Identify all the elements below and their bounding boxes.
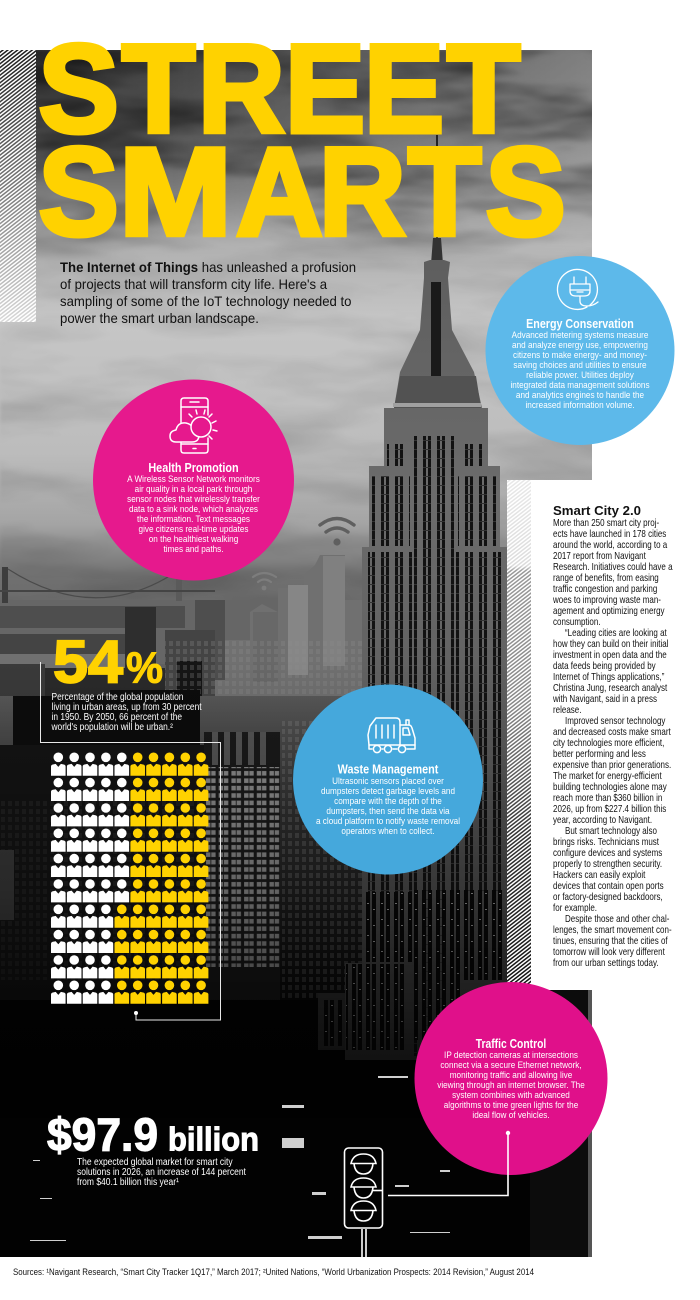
callout: 54 percent: % xyxy=(126,644,163,692)
sidebar: Smart City 2.0: investment in open data and the xyxy=(553,649,667,660)
panel: health promotion: A Wireless Sensor Network monitors xyxy=(127,474,260,484)
intro text: power the smart urban landscape. xyxy=(60,311,259,326)
Empire State Building xyxy=(345,135,507,1060)
distant bridge and water xyxy=(0,567,215,668)
panel: waste management: Waste Management xyxy=(338,763,438,777)
sidebar: Smart City 2.0: consumption. xyxy=(553,616,601,627)
sidebar: Smart City 2.0: range of benefits, from easing xyxy=(553,572,659,583)
panel: traffic control: viewing through an internet browser. The xyxy=(437,1080,585,1090)
panel: health promotion xyxy=(93,380,294,580)
panel: health promotion: times and paths. xyxy=(164,544,223,554)
panel: waste management: operators when to collect. xyxy=(341,826,435,836)
sources footnote: Sources: ¹Navigant Research, “Smart City Tracker 1Q17,” March 2017; ²United Nations, “World Urbanization Prospects: 2014 Revision,” August 2014 xyxy=(13,1267,534,1277)
sidebar: Smart City 2.0: tomorrow will look very different xyxy=(553,946,665,957)
sidebar: Smart City 2.0: Research. Initiatives could have a xyxy=(553,561,673,572)
street-level highlights xyxy=(30,1076,450,1241)
panel: energy conservation: and analytics engines to handle the xyxy=(516,390,644,400)
callout: market size: $97.9 xyxy=(47,1108,158,1160)
left hatched strip xyxy=(0,50,36,322)
sidebar: Smart City 2.0: Despite those and other chal- xyxy=(565,913,669,924)
sidebar: Smart City 2.0: But smart technology also xyxy=(565,825,657,836)
sidebar: Smart City 2.0: “Leading cities are looking at xyxy=(565,627,667,638)
panel: health promotion: data to a sink node, which analyzes xyxy=(129,504,259,514)
intro text: of projects that will transform city life. Here's a xyxy=(60,277,328,292)
panel: energy conservation: increased information volume. xyxy=(525,400,635,410)
sidebar: Smart City 2.0: building technologies alone may xyxy=(553,781,667,792)
photo: city skyline and Empire State Building xyxy=(0,50,600,1258)
callout: 54 percent: in 1950. By 2050, 66 percent of the xyxy=(52,711,182,722)
sidebar: Smart City 2.0: configure devices and systems xyxy=(553,847,663,858)
title: ARTS xyxy=(236,122,566,261)
sidebar: Smart City 2.0 xyxy=(552,503,673,968)
sidebar: Smart City 2.0: Smart City 2.0 xyxy=(553,503,641,518)
panel: waste management: Ultrasonic sensors placed over xyxy=(332,776,444,786)
title xyxy=(39,19,566,262)
callout: 54 percent: living in urban areas, up from 30 percent xyxy=(52,701,202,712)
panel: traffic control xyxy=(414,982,608,1175)
panel: waste management: dumpsters detect garbage levels and xyxy=(321,786,455,796)
callout: 54 percent xyxy=(51,628,202,732)
sidebar: Smart City 2.0: agement and optimizing energy xyxy=(553,605,665,616)
sidebar: Smart City 2.0: and decreased costs make smart xyxy=(553,726,671,737)
panel: traffic control: ideal flow of vehicles. xyxy=(472,1110,550,1120)
panel: health promotion: sensor nodes that wirelessly transfer xyxy=(127,494,260,504)
sidebar: Smart City 2.0: woes to improving waste man- xyxy=(552,594,661,605)
panel: energy conservation: citizens to make energy- and money- xyxy=(513,350,647,360)
callout: 54 percent: world's population will be urban.² xyxy=(51,721,173,732)
panel: energy conservation xyxy=(486,256,674,445)
panel: waste management: dumpsters, then send the data via xyxy=(326,806,450,816)
callout: 54 percent: 54 xyxy=(53,628,124,696)
sidebar: Smart City 2.0: tinues, ensuring that the cities of xyxy=(553,935,668,946)
sidebar: Smart City 2.0: from our urban settings today. xyxy=(553,957,659,968)
callout frame line xyxy=(40,662,220,1020)
panel: health promotion: air quality in a local park through xyxy=(135,484,252,494)
icon: phone with cloud and sun xyxy=(170,398,217,453)
sidebar: Smart City 2.0: how they can build on their initial xyxy=(553,638,669,649)
panel: traffic control: monitoring traffic and allowing live xyxy=(450,1070,572,1080)
panel: energy conservation: and analyze energy use, empowering xyxy=(512,340,648,350)
panel: traffic control: IP detection cameras at intersections xyxy=(444,1050,579,1060)
sky xyxy=(0,50,600,1257)
panel: health promotion: the information. Text messages xyxy=(137,514,251,524)
near city blocks xyxy=(0,690,364,1000)
sidebar: Smart City 2.0: data feeds being provided by xyxy=(553,660,656,671)
pictogram: 54 percent urban figures xyxy=(114,752,208,1004)
pictogram: 46 percent non-urban figures xyxy=(51,752,129,1004)
icon: traffic light with connector xyxy=(344,1131,510,1257)
sidebar: Smart City 2.0: reach more than $360 billion in xyxy=(553,792,662,803)
panel: traffic control: algorithms to time green lights for the xyxy=(444,1100,578,1110)
icon: garbage truck xyxy=(368,718,415,753)
panel: waste management: a cloud platform to notify waste removal xyxy=(316,816,460,826)
title: STREET xyxy=(39,19,520,159)
sidebar: Smart City 2.0: better performing and less xyxy=(553,748,646,759)
panel: energy conservation: Advanced metering systems measure xyxy=(512,330,649,340)
sidebar: Smart City 2.0: around the world, according to a xyxy=(553,539,668,550)
sidebar: Smart City 2.0: brings risks. Technicians must xyxy=(553,836,659,847)
callout: 54 percent: Percentage of the global population xyxy=(52,691,183,702)
sidebar: Smart City 2.0: properly to strengthen security. xyxy=(553,858,662,869)
panel: traffic control: Traffic Control xyxy=(476,1038,546,1051)
sidebar: Smart City 2.0: Internet of Things applications,” xyxy=(553,671,664,682)
icon: small wifi xyxy=(253,573,276,590)
sidebar: Smart City 2.0: The market for energy-efficient xyxy=(553,770,662,781)
panel: traffic control: connect via a secure Ethernet network, xyxy=(440,1060,582,1070)
callout: market size: The expected global market for smart city xyxy=(77,1156,233,1167)
sidebar: Smart City 2.0: with Navigant, said in a press xyxy=(552,693,657,704)
panel: energy conservation: saving choices and utilities to ensure xyxy=(513,360,647,370)
title: M xyxy=(119,122,232,262)
sidebar: Smart City 2.0: traffic congestion and parking xyxy=(553,583,657,594)
sidebar: Smart City 2.0: or factory-designed backdoors, xyxy=(553,891,663,902)
intro text: sampling of some of the IoT technology needed to xyxy=(60,294,351,309)
sidebar: Smart City 2.0: Christina Jung, research analyst xyxy=(553,682,668,693)
title: S xyxy=(39,122,119,261)
sidebar: Smart City 2.0: ects have launched in 178 cities xyxy=(553,528,667,539)
sidebar: Smart City 2.0: More than 250 smart city proj- xyxy=(553,517,659,528)
sidebar: Smart City 2.0: year, according to Navigant. xyxy=(553,814,652,825)
panel: health promotion: Health Promotion xyxy=(148,461,239,475)
panel: waste management: compare with the depth of the xyxy=(334,796,442,806)
sidebar: Smart City 2.0: 2017 report from Navigant xyxy=(553,550,646,561)
right hatched strip xyxy=(507,480,531,985)
small low-rise building xyxy=(318,993,345,1050)
darkening toward street level xyxy=(0,728,592,1257)
callout: market size: solutions in 2026, an increase of 144 percent xyxy=(77,1166,246,1177)
windowed building xyxy=(204,732,280,967)
sidebar: Smart City 2.0: 2026, up from $227.4 billion this xyxy=(553,803,667,814)
sidebar: Smart City 2.0: Hackers can easily exploit xyxy=(553,869,646,880)
panel: health promotion: give citizens real-time updates xyxy=(139,524,249,534)
sidebar: Smart City 2.0: Improved sensor technology xyxy=(565,715,666,726)
sidebar: Smart City 2.0: release. xyxy=(553,704,581,715)
panel: energy conservation: integrated data management solutions xyxy=(510,380,650,390)
panel: waste management xyxy=(293,684,483,874)
sidebar: Smart City 2.0: expensive than prior generations. xyxy=(553,759,671,770)
sidebar: Smart City 2.0: devices that contain open ports xyxy=(553,880,664,891)
panel: traffic control: system combines with advanced xyxy=(452,1090,570,1100)
callout: market size xyxy=(47,1108,259,1187)
sidebar: Smart City 2.0: city technologies more efficient, xyxy=(553,737,664,748)
icon: plug xyxy=(557,269,598,309)
panel: energy conservation: Energy Conservation xyxy=(526,317,634,331)
callout: market size: from $40.1 billion this year¹ xyxy=(77,1176,179,1187)
intro text xyxy=(60,260,356,326)
intro text: The Internet of Things has unleashed a profusion xyxy=(60,260,356,275)
panel: energy conservation: reliable power. Utilities deploy xyxy=(526,370,634,380)
sidebar: Smart City 2.0: lenges, the smart movement con- xyxy=(553,924,672,935)
callout: market size: billion xyxy=(168,1120,259,1158)
mid-distance skyline xyxy=(0,555,362,696)
sidebar: Smart City 2.0: for example. xyxy=(553,902,597,913)
icon: large wifi xyxy=(320,518,354,546)
panel: health promotion: on the healthiest walking xyxy=(149,534,238,544)
